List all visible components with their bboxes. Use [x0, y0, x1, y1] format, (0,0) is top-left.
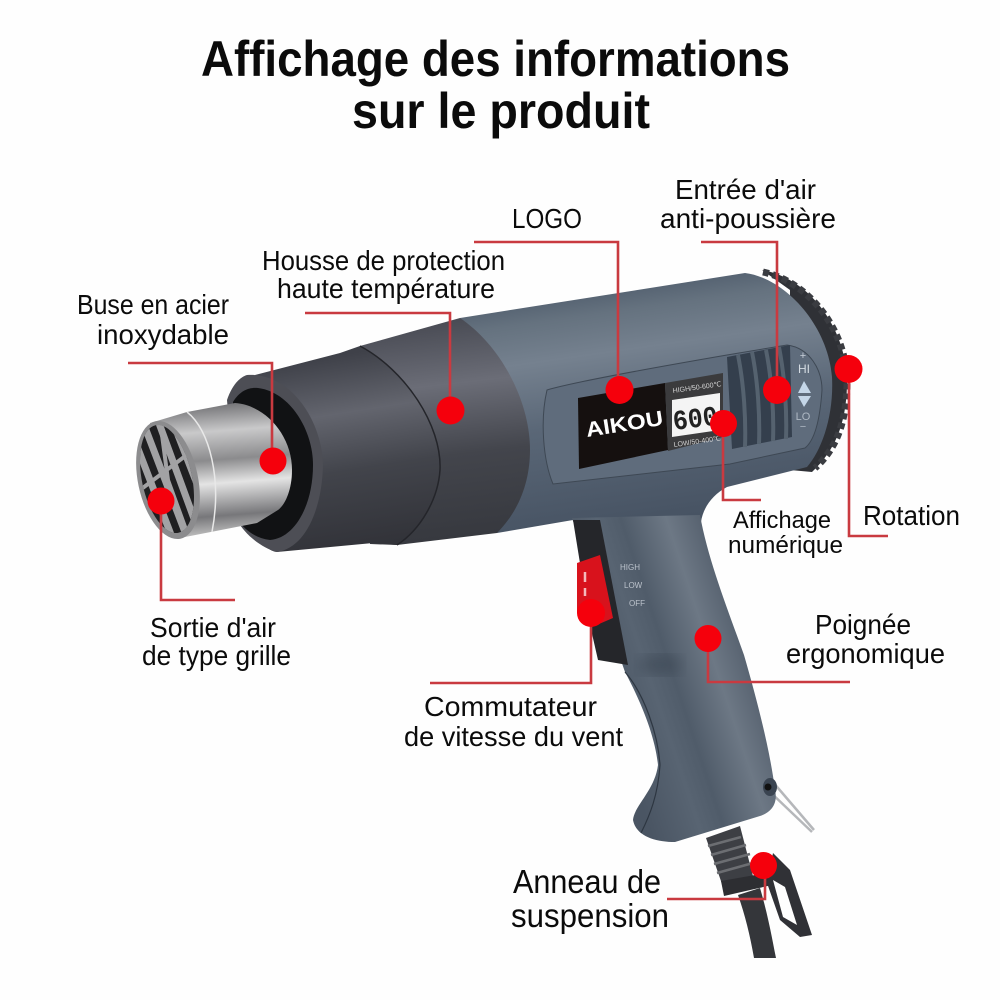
callout: Anneau de suspension: suspension: [511, 897, 669, 934]
rotating rear dial: [762, 270, 847, 472]
callout: Anneau de suspension: Anneau de: [513, 863, 661, 900]
hi lo buttons: [796, 350, 811, 433]
callout: Rotation: [834, 355, 960, 536]
black switch housing: [573, 520, 628, 665]
hi lo buttons: LO: [796, 411, 811, 423]
callout: Rotation: Rotation: [863, 500, 960, 531]
nozzle collar: [227, 375, 323, 552]
title: sur le produit: [352, 83, 650, 139]
air outlet grille: [136, 421, 200, 539]
control panel recess: [543, 345, 822, 484]
digital display: LOW/50-400℃: [673, 435, 722, 449]
digital display: 600: [671, 403, 720, 439]
callout: Affichage numérique: [710, 410, 843, 559]
air intake vents: [727, 345, 792, 449]
switch position labels: OFF: [629, 599, 645, 608]
callout: Affichage numérique: numérique: [728, 532, 843, 559]
callout: Buse en acier inoxydable: [77, 289, 286, 474]
title: Affichage des informations: [201, 31, 790, 87]
hanging ring: [767, 853, 812, 937]
body housing: [460, 273, 832, 533]
callout: Anneau de suspension: [511, 852, 777, 934]
callout: Commutateur de vitesse du vent: de vitesse du vent: [404, 721, 623, 752]
logo plate: [578, 383, 668, 469]
hi lo buttons: −: [800, 421, 806, 433]
callout: Entrée d'air anti-poussière: Entrée d'air: [675, 174, 816, 205]
callout: Entrée d'air anti-poussière: anti-poussière: [660, 203, 836, 234]
wire stand: [768, 781, 814, 832]
callout: Sortie d'air de type grille: [142, 488, 291, 671]
callout: Poignée ergonomique: ergonomique: [786, 638, 945, 669]
heat gun product illustration: [118, 270, 847, 958]
callout: Poignée ergonomique: Poignée: [815, 609, 911, 640]
callout: Housse de protection haute température: haute température: [277, 273, 495, 304]
callout: Affichage numérique: Affichage: [733, 507, 831, 534]
logo plate: AIKOU: [584, 407, 665, 442]
callout: Buse en acier inoxydable: Buse en acier: [77, 289, 229, 320]
hi lo buttons: HI: [798, 362, 810, 376]
stainless steel nozzle: [150, 403, 292, 538]
digital display: [665, 373, 723, 451]
callout: Commutateur de vitesse du vent: Commutateur: [424, 691, 597, 722]
callout: Housse de protection haute température: [262, 245, 505, 424]
high temperature sleeve: [360, 318, 530, 545]
callout: Housse de protection haute température: Housse de protection: [262, 245, 505, 276]
switch position labels: [620, 563, 645, 608]
callout: Sortie d'air de type grille: Sortie d'air: [150, 612, 276, 643]
digital display: HIGH/50-600℃: [672, 381, 722, 395]
callout: Sortie d'air de type grille: de type grille: [142, 640, 291, 671]
hi lo buttons: +: [800, 350, 806, 362]
pistol grip handle: [572, 515, 777, 842]
red speed switch: [577, 555, 613, 627]
title: [201, 31, 790, 139]
callout: Commutateur de vitesse du vent: [404, 599, 623, 752]
power cord with strain relief: [706, 826, 776, 958]
front cone: [249, 346, 440, 552]
callout: Poignée ergonomique: [694, 609, 945, 682]
switch position labels: HIGH: [620, 563, 640, 572]
callout: LOGO: [474, 203, 634, 404]
callout: Buse en acier inoxydable: inoxydable: [97, 319, 229, 350]
switch position labels: LOW: [624, 581, 643, 590]
callout: Entrée d'air anti-poussière: [660, 174, 836, 404]
callout: LOGO: LOGO: [512, 203, 582, 234]
